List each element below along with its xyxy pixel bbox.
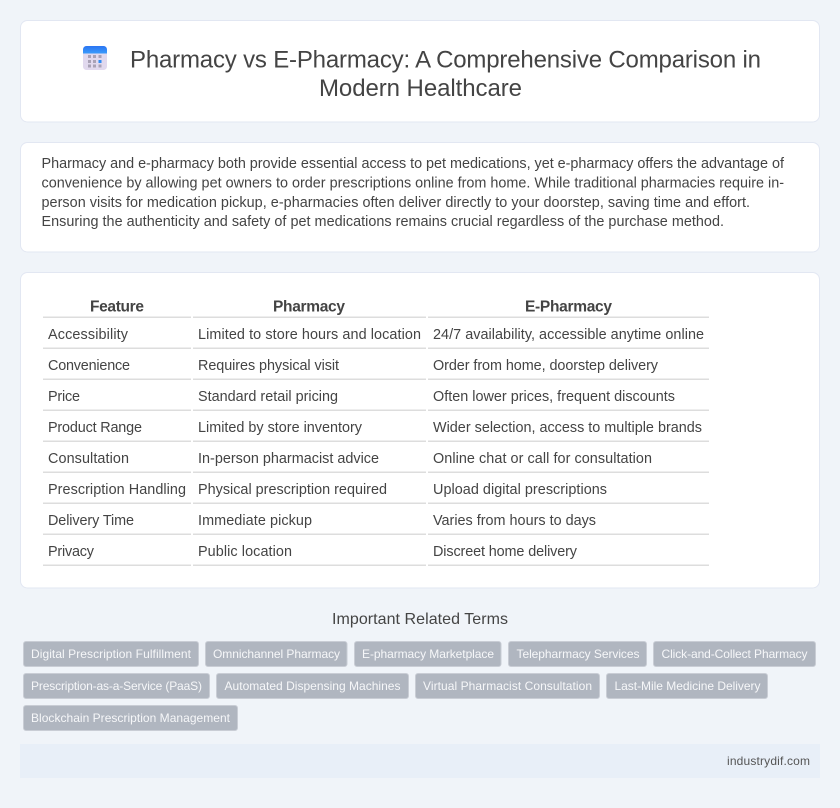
table row: product range: Product Range [48, 420, 142, 436]
chip: prescription-as-a-service: Prescription-as-a-Service (PaaS) [31, 679, 202, 693]
chip: last-mile medicine delivery [606, 674, 768, 698]
chip: click-and-collect pharmacy [654, 642, 816, 666]
table header row [90, 298, 612, 316]
panel: introduction [20, 142, 820, 252]
table row: product range: Wider selection, access to multiple brands [433, 420, 702, 436]
panel: comparison table [20, 272, 820, 588]
chip: prescription-as-a-service [24, 674, 210, 698]
chip: blockchain prescription management [24, 706, 238, 730]
table row: delivery time: Varies from hours to days [433, 513, 596, 529]
chip: click-and-collect pharmacy: Click-and-Collect Pharmacy [662, 647, 808, 661]
footer source text: industrydif.com [727, 754, 810, 768]
table row: prescription handling [48, 482, 607, 498]
table row: price [48, 389, 675, 405]
chip: last-mile medicine delivery: Last-Mile Medicine Delivery [614, 679, 760, 693]
table row: delivery time: Delivery Time [48, 513, 134, 529]
chip: automated dispensing machines: Automated Dispensing Machines [224, 679, 400, 693]
chip: e-pharmacy marketplace: E-pharmacy Marketplace [362, 647, 494, 661]
text block: intro paragraph: Pharmacy and e-pharmacy both provide essential access to pet medications, yet e-pharmacy offers the advantage of [42, 156, 785, 172]
table header row: Feature [90, 298, 144, 316]
chip: omnichannel pharmacy [206, 642, 347, 666]
table row: consultation: Online chat or call for consultation [433, 451, 652, 467]
text block: intro paragraph: Ensuring the authenticity and safety of pet medications remains crucial regardless of the purchase method. [42, 214, 724, 230]
table row: convenience: Order from home, doorstep delivery [433, 358, 659, 374]
chip: omnichannel pharmacy: Omnichannel Pharmacy [213, 647, 340, 661]
title: Modern Healthcare [319, 75, 522, 102]
table row: privacy: Public location [198, 544, 292, 560]
table row: prescription handling: Prescription Handling [48, 482, 186, 498]
table row: prescription handling: Physical prescription required [198, 482, 387, 498]
chip: automated dispensing machines [216, 674, 408, 698]
text block: intro paragraph: convenience by allowing pet owners to order prescriptions online from home. While traditional pharmacies require in- [42, 176, 784, 192]
table row: price: Standard retail pricing [198, 389, 338, 405]
icon: calendar [83, 46, 107, 70]
text block: intro paragraph [42, 156, 785, 230]
table row: privacy: Privacy [48, 544, 95, 560]
table row: consultation [48, 451, 652, 467]
table row: accessibility [48, 327, 704, 343]
chip: telepharmacy services [508, 642, 646, 666]
table header row: Pharmacy [273, 298, 345, 316]
table row: privacy: Discreet home delivery [433, 544, 578, 560]
related terms chips [24, 642, 816, 730]
table row: convenience: Requires physical visit [198, 358, 339, 374]
table row: privacy [48, 544, 578, 560]
title [130, 46, 761, 102]
table row: consultation: Consultation [48, 451, 129, 467]
table row: delivery time: Immediate pickup [198, 513, 312, 529]
table row: product range [48, 420, 702, 436]
table row: product range: Limited by store inventory [198, 420, 363, 436]
chip: digital prescription fulfillment: Digital Prescription Fulfillment [31, 647, 192, 661]
chip: virtual pharmacist consultation [416, 674, 600, 698]
table row: delivery time [48, 513, 596, 529]
table row: accessibility: Limited to store hours and location [198, 327, 421, 343]
chip: e-pharmacy marketplace [354, 642, 501, 666]
table row: convenience: Convenience [48, 358, 130, 374]
text block: intro paragraph: person visits for medication pickup, e-pharmacies often deliver directly to your doorstep, saving time and effort. [42, 195, 750, 211]
table header row: E-Pharmacy [525, 298, 612, 316]
title: Pharmacy vs E-Pharmacy: A Comprehensive Comparison in [130, 46, 761, 74]
heading: related terms: Important Related Terms [332, 611, 508, 628]
table row: price: Often lower prices, frequent discounts [433, 389, 675, 405]
chip: virtual pharmacist consultation: Virtual Pharmacist Consultation [423, 679, 592, 693]
table row: price: Price [48, 389, 80, 405]
chip: digital prescription fulfillment [24, 642, 198, 666]
footer [20, 744, 820, 778]
table row: consultation: In-person pharmacist advice [198, 451, 379, 467]
table row: convenience [48, 358, 659, 374]
chip: blockchain prescription management: Blockchain Prescription Management [31, 711, 231, 725]
header panel [20, 20, 820, 122]
table row: accessibility: 24/7 availability, accessible anytime online [433, 327, 704, 343]
table row: accessibility: Accessibility [48, 327, 129, 343]
table row: prescription handling: Upload digital prescriptions [433, 482, 607, 498]
chip: telepharmacy services: Telepharmacy Services [516, 647, 640, 661]
